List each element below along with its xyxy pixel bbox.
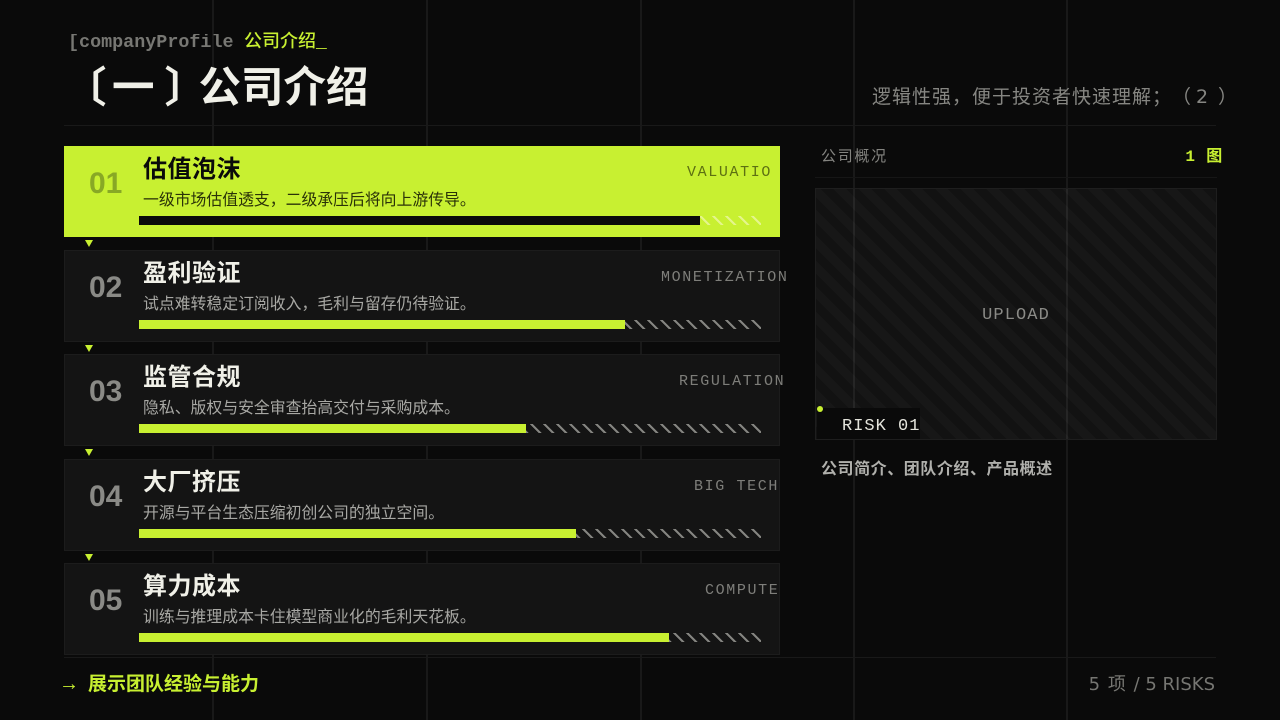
card 01: valuation bubble <box>64 146 780 237</box>
tag MONETIZATION: MONETIZATION <box>661 269 788 286</box>
tag VALUATIO: VALUATIO <box>687 164 772 181</box>
subtitle: （ <box>1172 86 1192 108</box>
tag BIG TECH: BIG TECH <box>694 478 779 495</box>
subtitle: 逻辑性强，便于投资者快速理解； <box>872 86 1172 108</box>
image placeholder <box>815 188 1217 440</box>
title: 公司介绍 <box>198 65 369 112</box>
title: 一 <box>112 65 155 112</box>
tag COMPUTE: COMPUTE <box>705 582 779 599</box>
upload label: UPLOAD <box>982 306 1050 325</box>
image count: 1 图 <box>1185 148 1223 166</box>
subtitle: ） <box>1218 86 1238 108</box>
number 02: 02 <box>89 271 122 304</box>
image caption: 公司简介、团队介绍、产品概述 <box>821 461 1053 478</box>
description 02: 试点难转稳定订阅收入，毛利与留存仍待验证。 <box>143 296 476 313</box>
number 04: 04 <box>89 480 122 513</box>
description 03: 隐私、版权与安全审查抬高交付与采购成本。 <box>143 400 460 417</box>
progress bar 02 <box>139 320 761 329</box>
callout text: 展示团队经验与能力 <box>88 674 259 695</box>
progress bar 03 <box>139 424 761 433</box>
tag REGULATION: REGULATION <box>679 373 785 390</box>
marker arrow 3 <box>85 449 93 456</box>
risk tag: RISK 01 <box>842 417 920 436</box>
overview label: 公司概况 <box>821 148 888 165</box>
eyebrow label <box>68 32 327 53</box>
subtitle: 2 <box>1196 86 1209 108</box>
number 05: 05 <box>89 584 122 617</box>
marker arrow 2 <box>85 345 93 352</box>
progress bar 01 <box>139 216 761 225</box>
progress bar 05 <box>139 633 761 642</box>
title: 〕 <box>164 65 207 112</box>
card 04: big tech <box>64 459 780 551</box>
accent dot <box>817 406 823 412</box>
card 05: compute <box>64 563 780 655</box>
icon: arrow: → <box>59 673 79 695</box>
card 03: regulation <box>64 354 780 446</box>
eyebrow label: 公司介绍_ <box>244 33 327 53</box>
footer count: 5 项 / 5 RISKS <box>1089 674 1215 695</box>
heading 算力成本: 算力成本 <box>143 573 241 600</box>
heading 大厂挤压: 大厂挤压 <box>143 469 241 496</box>
panel heading: company overview <box>815 145 1217 178</box>
panel: risk list <box>64 146 788 655</box>
card 02: monetization <box>64 250 780 342</box>
heading 监管合规: 监管合规 <box>143 364 241 391</box>
marker arrow 4 <box>85 554 93 561</box>
title <box>64 65 369 112</box>
marker arrow 1 <box>85 240 93 247</box>
description 04: 开源与平台生态压缩初创公司的独立空间。 <box>143 505 444 522</box>
heading 盈利验证: 盈利验证 <box>143 260 241 287</box>
risk tag <box>817 408 920 439</box>
heading 估值泡沫: 估值泡沫 <box>143 156 241 183</box>
number 01: 01 <box>89 167 122 200</box>
progress bar 04 <box>139 529 761 538</box>
title: 〔 <box>64 65 107 112</box>
number 03: 03 <box>89 375 122 408</box>
description 01: 一级市场估值透支，二级承压后将向上游传导。 <box>143 192 476 209</box>
description 05: 训练与推理成本卡住模型商业化的毛利天花板。 <box>143 609 476 626</box>
footer callout <box>59 673 259 695</box>
